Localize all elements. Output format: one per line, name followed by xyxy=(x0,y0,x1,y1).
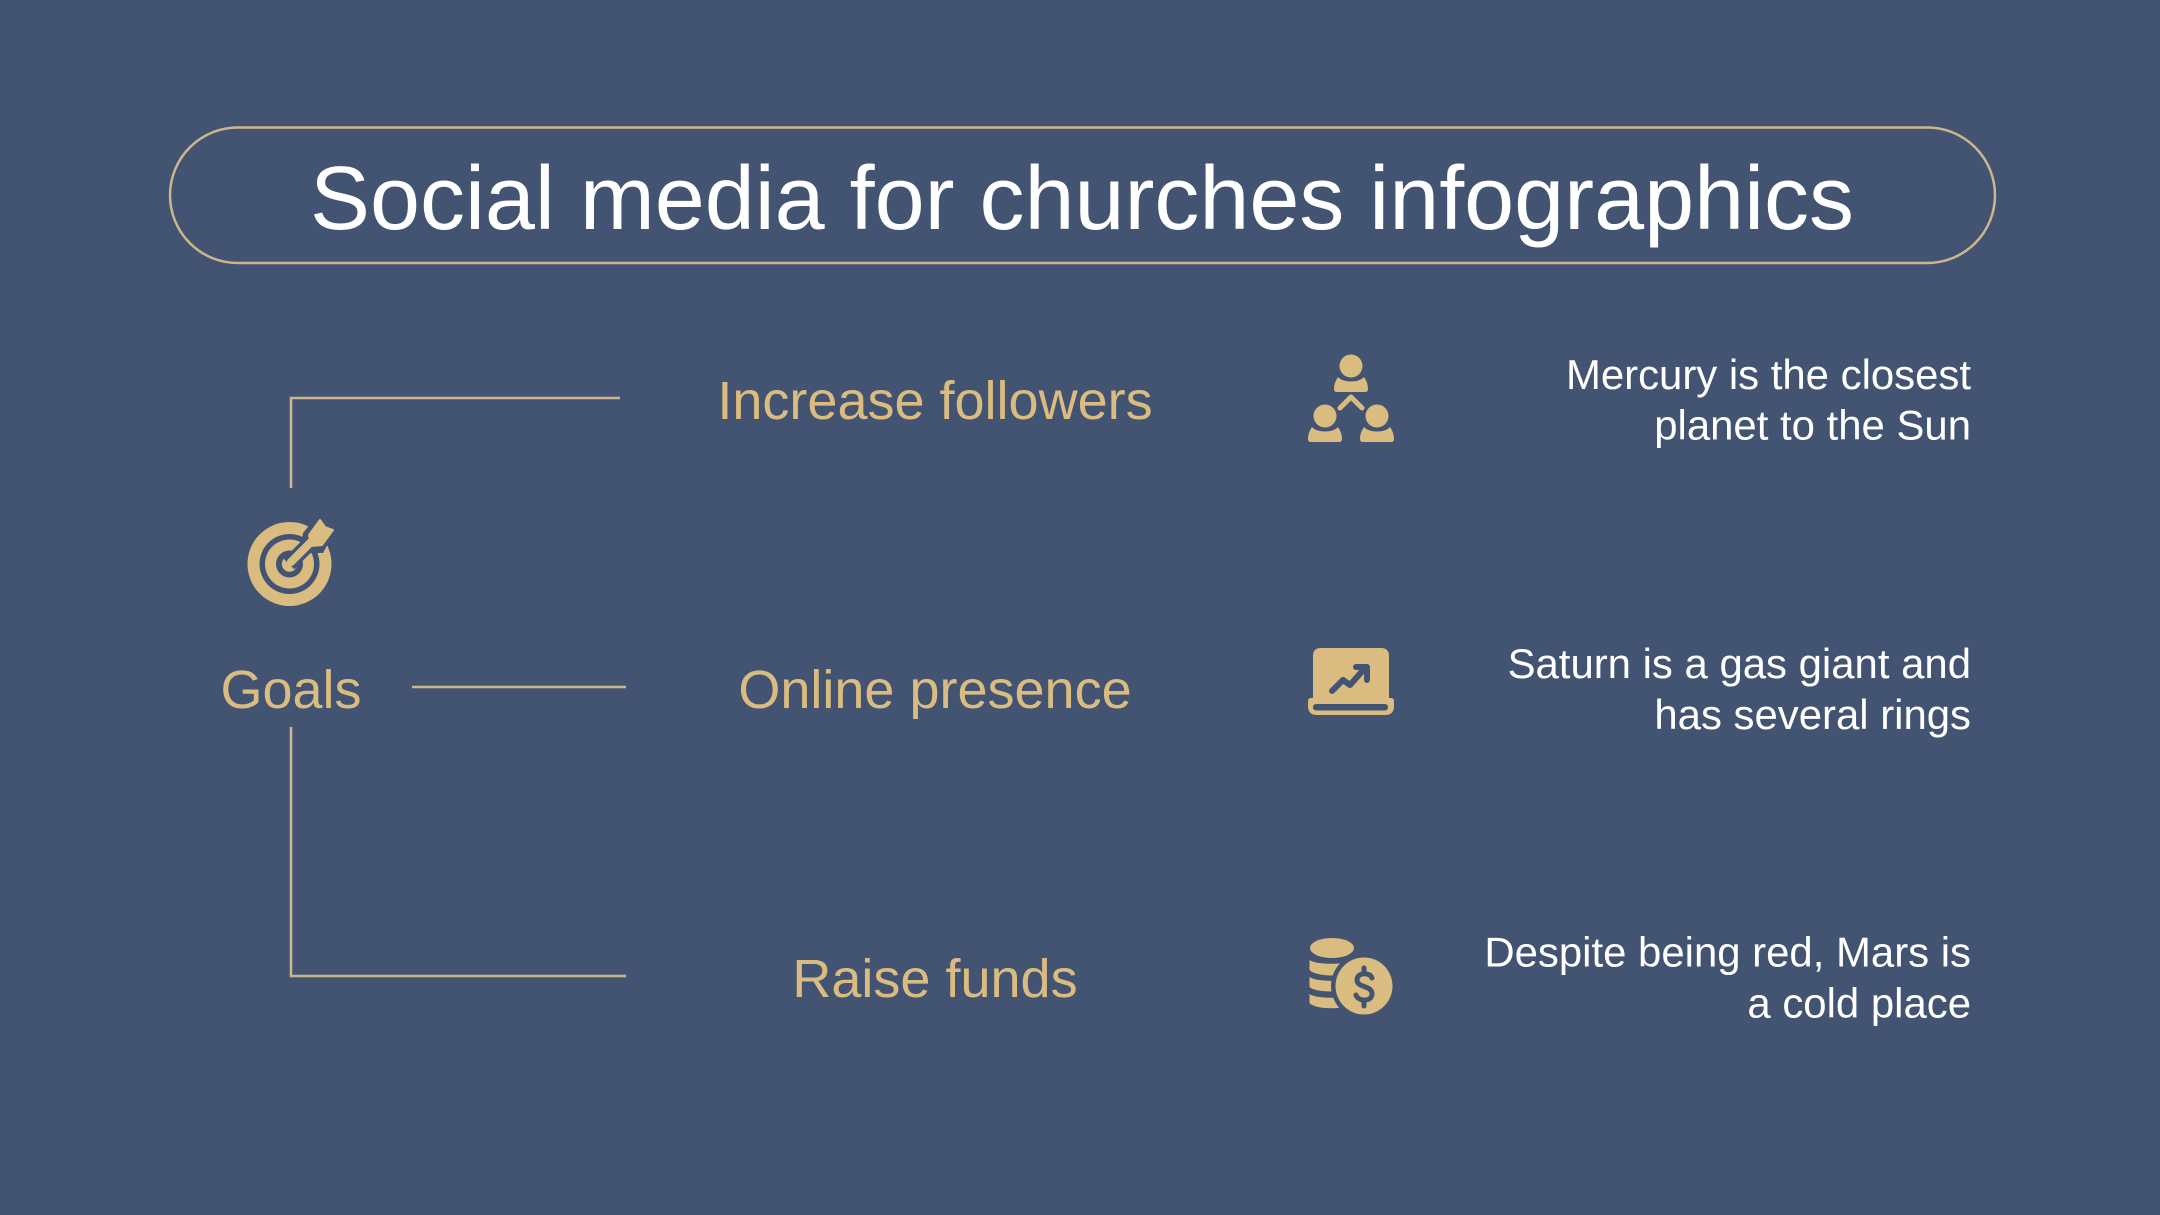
icon: coins with dollar xyxy=(1310,938,1397,1019)
icon: laptop with growth arrow xyxy=(1308,648,1394,715)
icon: people network xyxy=(1308,354,1394,442)
label: Increase followers: Increase followers xyxy=(717,371,1153,431)
text: Mars: Despite being red, Mars is xyxy=(1484,928,1971,976)
text: Mars: a cold place xyxy=(1747,980,1971,1026)
text: Saturn: Saturn is a gas giant and xyxy=(1508,640,1971,687)
icon: target xyxy=(248,511,337,606)
label: Online presence: Online presence xyxy=(738,660,1132,720)
text: Mercury: planet to the Sun xyxy=(1654,402,1971,448)
label: Goals: Goals xyxy=(220,660,362,720)
connector: middle xyxy=(412,686,626,688)
connector: bottom xyxy=(291,727,626,976)
label: Raise funds: Raise funds xyxy=(792,949,1078,1009)
text: Saturn: has several rings xyxy=(1654,691,1971,738)
title pill xyxy=(170,128,1995,263)
title pill: Social media for churches infographics xyxy=(310,149,1854,249)
text: Mercury: Mercury is the closest xyxy=(1566,351,1971,398)
connector: top xyxy=(291,398,620,488)
